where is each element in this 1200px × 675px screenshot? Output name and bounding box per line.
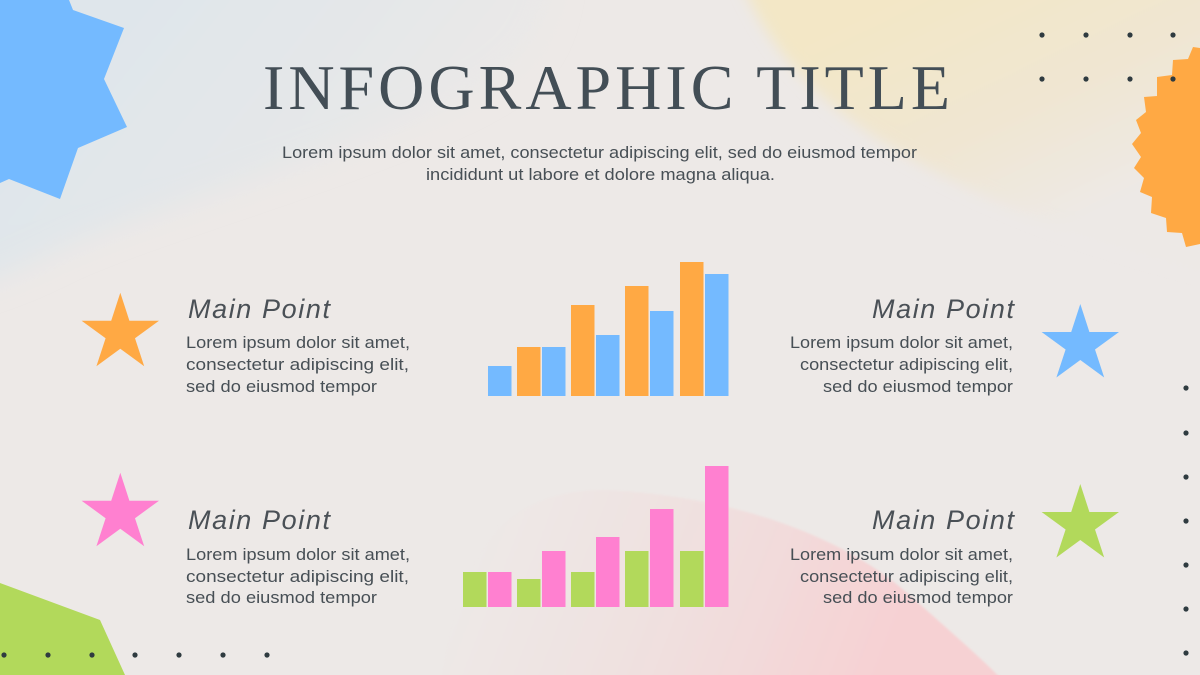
text block: Lorem ipsum dolor sit amet, [186,546,410,564]
text block: consectetur adipiscing elit, [186,356,409,374]
text block: Lorem ipsum dolor sit amet, [186,334,410,352]
bar chart: orange and blue [488,262,728,396]
subtitle: incididunt ut labore et dolore magna aliqua. [426,166,775,184]
dot grid: top right [1039,32,1176,82]
dot column: right [1183,385,1189,656]
icon: blue star [1042,304,1119,378]
heading: Main Point [872,505,1015,535]
panel: top left main point [186,294,410,396]
text block: sed do eiusmod tempor [823,378,1014,396]
text block: Lorem ipsum dolor sit amet, [790,546,1013,564]
bar chart: green and pink [463,466,728,607]
subtitle: Lorem ipsum dolor sit amet, consectetur adipiscing elit, sed do eiusmod tempor [282,144,918,162]
title: INFOGRAPHIC TITLE [263,52,954,123]
text block: Lorem ipsum dolor sit amet, [790,334,1013,352]
text block: consectetur adipiscing elit, [800,568,1013,586]
text block [186,334,410,396]
text block: sed do eiusmod tempor [186,589,378,607]
text block [186,546,410,607]
icon: green star [1042,484,1119,558]
text block: consectetur adipiscing elit, [186,568,409,586]
subtitle [282,144,918,184]
heading: Main Point [872,294,1015,324]
decorative shape: green polygon [0,583,125,675]
dot row: bottom left [1,652,270,658]
heading: Main Point [188,505,331,535]
panel: bottom right main point [790,505,1015,607]
text block: consectetur adipiscing elit, [800,356,1013,374]
text block [790,546,1014,607]
decorative shape: orange starburst [1132,47,1200,247]
panel: top right main point [790,294,1015,396]
panel: bottom left main point [186,505,410,607]
text block: sed do eiusmod tempor [823,589,1014,607]
text block [790,334,1014,396]
text block: sed do eiusmod tempor [186,378,378,396]
icon: orange star [82,293,159,366]
icon: pink star [82,473,159,546]
decorative shape: blue starburst [0,0,127,199]
heading: Main Point [188,294,331,324]
